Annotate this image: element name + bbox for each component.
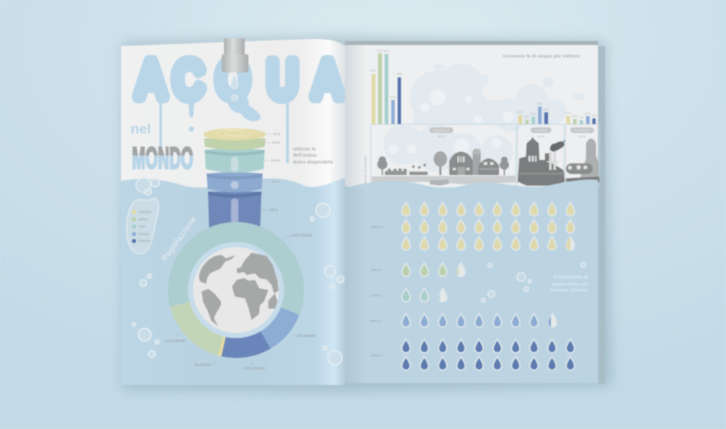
heading: freshwater use: dell'acqua	[293, 153, 317, 158]
agriculture scene	[372, 127, 516, 186]
heading: freshwater use	[293, 146, 333, 164]
sector label: domestic: 12 %	[579, 134, 586, 138]
right page bubbles	[481, 263, 586, 302]
bar chart: domestic	[565, 113, 597, 124]
population legend: Europa	[139, 232, 150, 236]
water availability labels: 8540 m³	[371, 319, 382, 323]
small barn	[478, 158, 499, 175]
domestic scene	[566, 127, 599, 182]
globe continents	[199, 253, 279, 326]
bar chart: agriculture: 49 %	[397, 74, 402, 76]
bar chart: domestic: 12 %	[591, 115, 597, 117]
cup percentage labels: 6,6 %	[272, 141, 280, 145]
sector label: domestic: Domestico	[574, 128, 590, 132]
stacked cups chart	[203, 128, 280, 235]
bar chart: industry	[517, 104, 549, 124]
blue segment	[260, 307, 299, 348]
bar chart: agriculture: 41 %	[371, 71, 376, 73]
green segment	[170, 302, 223, 356]
donut labels: 1.216.000.000	[164, 339, 185, 343]
heading: consumption by sector: Consumo % di acqua per settore:	[503, 53, 581, 58]
sector label: agriculture: 69 %	[438, 134, 445, 138]
bar chart: industry: 10 %	[531, 114, 536, 116]
barn	[449, 152, 473, 175]
right page water	[345, 179, 598, 383]
water availability labels: 20250 m³	[371, 354, 383, 358]
yellow segment	[218, 336, 226, 356]
bar chart: domestic: 10 %	[572, 116, 577, 118]
donut labels: 39.000.000	[194, 363, 211, 367]
title drips	[159, 98, 289, 168]
heading: freshwater use: Utilizzo %	[293, 146, 316, 151]
faucet	[222, 38, 248, 101]
subtitle nel: nel	[131, 120, 151, 136]
panel: left page	[121, 38, 345, 385]
donut labels: 4.347.000.000	[291, 234, 312, 238]
sector label: domestic	[570, 127, 594, 138]
bar chart: agriculture: 81 %	[377, 50, 383, 52]
callout: water availability per person	[550, 275, 588, 293]
top shadow on right page	[345, 41, 598, 45]
total label: Totale mondiale	[363, 155, 368, 186]
drops: Europe	[402, 314, 556, 327]
left page water	[121, 178, 345, 385]
drops: Asia	[402, 288, 447, 302]
subtitle MONDO: MONDO	[132, 141, 193, 175]
donut labels: 743.000.000	[297, 334, 315, 338]
yellow lid	[203, 128, 266, 140]
population legend: America	[139, 239, 151, 243]
cup percentage labels: 21 %	[273, 132, 280, 136]
sector frames	[371, 124, 599, 188]
dark blue cup	[208, 192, 261, 235]
fold shading	[345, 45, 365, 383]
book shadow	[122, 36, 612, 392]
cup percentage labels	[271, 132, 280, 184]
bar chart: agriculture	[371, 50, 402, 124]
sector label: agriculture: Agricoltura	[433, 128, 449, 132]
bar chart: domestic: 7 %	[579, 118, 583, 120]
bar chart: industry: 38 %	[537, 104, 542, 106]
callout: water availability per person: Disponibilità di	[554, 275, 588, 280]
cup percentage labels: 9,3 %	[271, 180, 279, 184]
drops: Oceania	[402, 202, 574, 250]
green cup	[204, 138, 266, 150]
panel: right page	[345, 41, 605, 384]
sector label: agriculture	[429, 127, 453, 138]
bar chart: domestic: 17 %	[585, 113, 590, 115]
bar chart: agriculture: 27 %	[390, 97, 396, 99]
cup percentage labels: 27,9 %	[271, 158, 280, 162]
bar chart: industry: 16 %	[517, 112, 523, 114]
bar chart: domestic: 17 %	[565, 113, 571, 115]
population label: Popolazione	[159, 214, 198, 263]
page stack edge	[598, 46, 605, 384]
donut labels	[164, 208, 315, 370]
donut labels: 48 %	[270, 208, 278, 212]
population legend	[127, 198, 159, 254]
population legend: Asia	[139, 225, 145, 229]
teal cup	[205, 148, 265, 173]
drops: America	[402, 339, 574, 370]
bar chart: industry: 24 %	[544, 109, 549, 111]
callout: water availability per person: acqua dolce per	[552, 281, 588, 286]
teal segment	[168, 222, 304, 315]
bar chart: industry: 5 %	[525, 117, 529, 119]
drops: Africa	[402, 263, 465, 276]
title ACQUA: ACQUA	[137, 51, 341, 108]
lower left page	[127, 178, 344, 370]
bubbles	[132, 178, 344, 365]
water availability labels	[371, 225, 383, 358]
population donut	[168, 222, 304, 358]
blue cup	[207, 172, 263, 192]
silo	[473, 149, 481, 175]
background clouds	[383, 63, 585, 172]
water availability labels: 2750 m³	[371, 294, 382, 298]
title ACQUA	[131, 38, 341, 235]
sector label: industry	[531, 127, 551, 138]
bar chart: agriculture: 81 %	[384, 51, 389, 53]
sector label: industry: 19 %	[538, 134, 545, 138]
heading: freshwater use: dolce disponibile	[293, 159, 333, 164]
water availability labels: 3500 m³	[371, 268, 382, 272]
dark blue segment	[221, 331, 271, 358]
sector label: industry: Industria	[535, 128, 548, 132]
population legend: Africa	[139, 217, 147, 221]
population legend: Oceania	[139, 210, 151, 214]
water availability labels: 29800 m³	[371, 225, 383, 229]
callout: water availability per person: persona all'anno	[550, 288, 588, 293]
industry scene	[518, 127, 565, 186]
donut labels: 1.002.000.000	[244, 366, 265, 370]
